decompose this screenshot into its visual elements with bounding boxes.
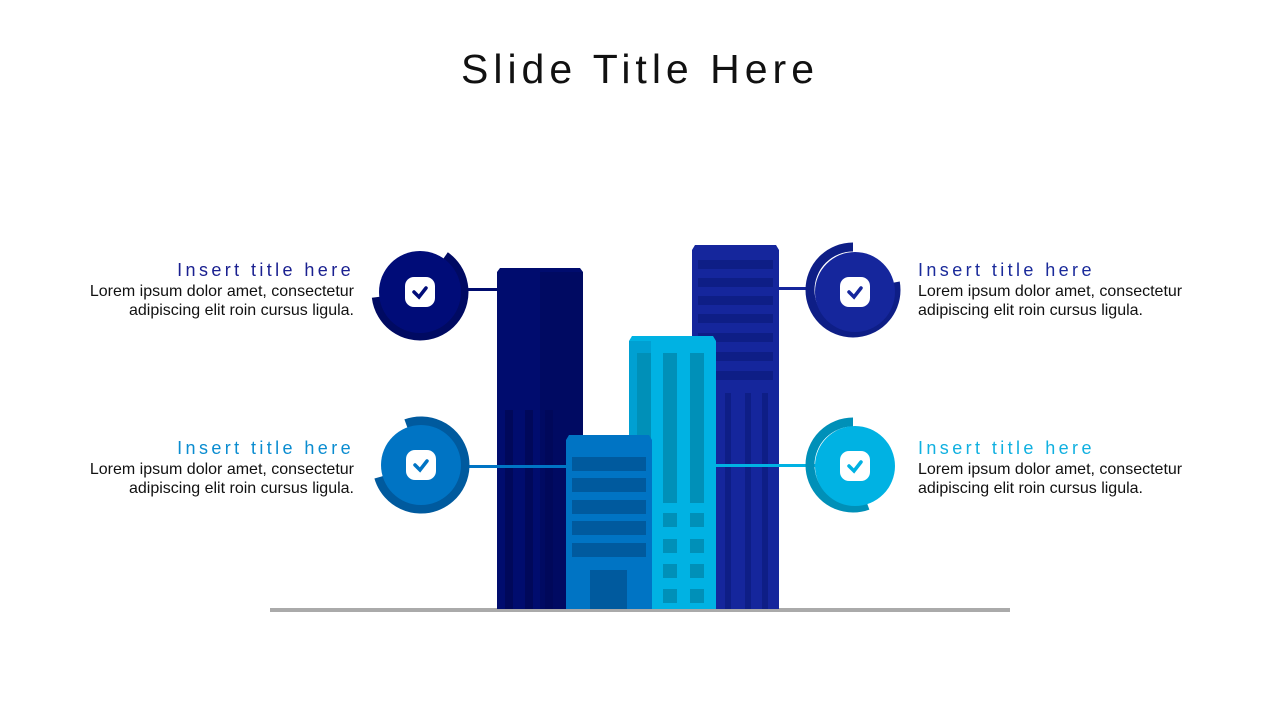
ground line [270, 608, 1010, 612]
building: right tall [692, 245, 779, 609]
icon: check circle bottom-right [810, 422, 896, 508]
text block: bottom-left: adipiscing elit roin cursus ligula. [129, 480, 354, 497]
building: dark navy left [497, 268, 583, 609]
text block: bottom-right: Insert title here [918, 438, 1095, 458]
text block: bottom-left: Insert title here [177, 438, 354, 458]
text block: bottom-right: adipiscing elit roin cursus ligula. [918, 480, 1143, 497]
text block: bottom-right: Lorem ipsum dolor amet, consectetur [918, 461, 1182, 478]
text block: top-right: adipiscing elit roin cursus ligula. [918, 302, 1143, 319]
text block: bottom-right [918, 438, 1182, 497]
text block: top-right: Lorem ipsum dolor amet, consectetur [918, 283, 1182, 300]
text block: bottom-left [90, 438, 354, 497]
building: cyan middle [629, 336, 716, 609]
text block: bottom-left: Lorem ipsum dolor amet, consectetur [90, 461, 354, 478]
text block: top-right: Insert title here [918, 260, 1095, 280]
icon: check circle top-left [359, 231, 481, 353]
icon: check circle top-right [810, 247, 896, 333]
connector lines [460, 287, 820, 468]
icon: check circle bottom-left [365, 409, 477, 521]
building: blue front [566, 435, 652, 609]
text block: top-left: adipiscing elit roin cursus ligula. [129, 302, 354, 319]
text block: top-right [918, 260, 1182, 319]
title: Slide Title Here [461, 46, 819, 92]
text block: top-left [90, 260, 354, 319]
text block: top-left: Lorem ipsum dolor amet, consectetur [90, 283, 354, 300]
text block: top-left: Insert title here [177, 260, 354, 280]
